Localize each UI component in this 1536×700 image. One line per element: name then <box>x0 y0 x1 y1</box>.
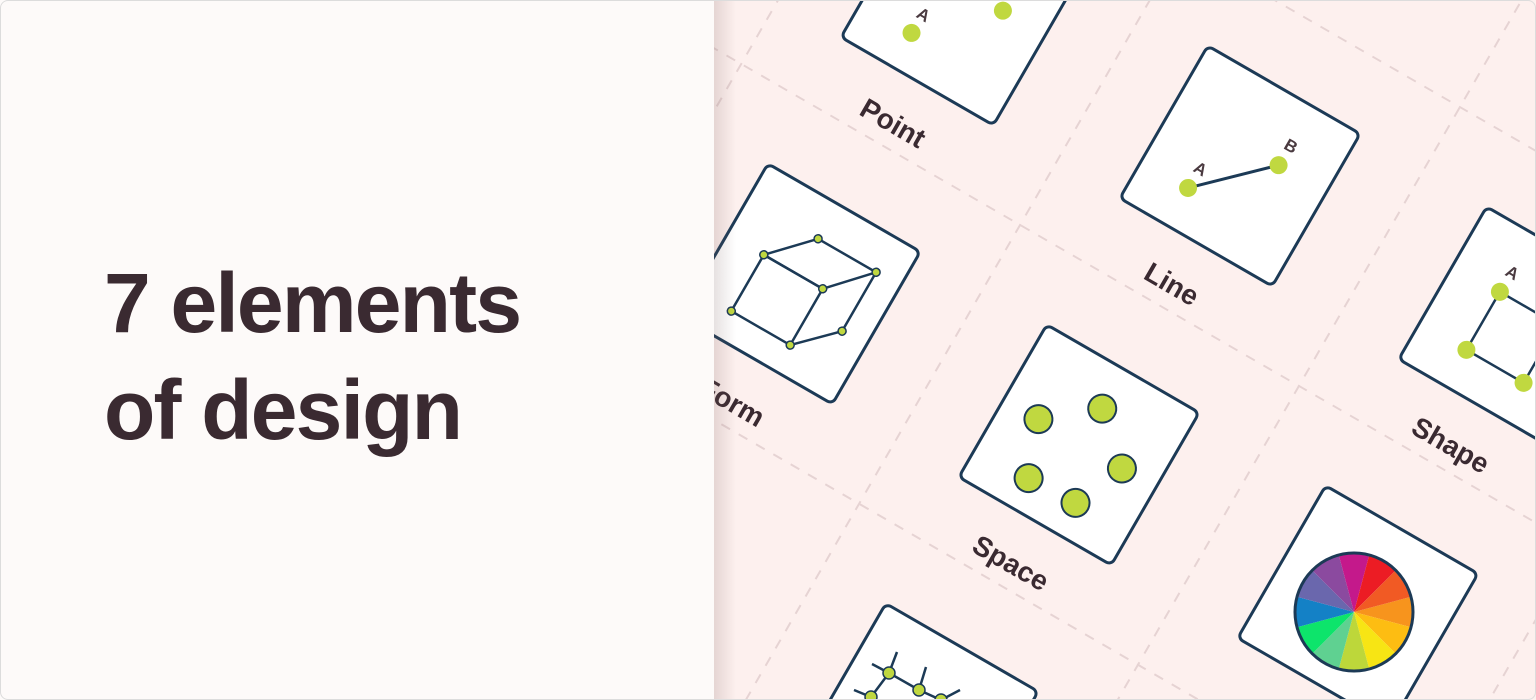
card: Shape <box>1367 207 1536 503</box>
card: Point <box>809 0 1081 181</box>
icon: texture network <box>854 652 960 700</box>
card: Point: A <box>913 4 933 26</box>
left panel <box>0 0 714 700</box>
card: Line: B <box>1281 135 1301 158</box>
card: Shape: Shape <box>1406 411 1495 480</box>
title: of design <box>104 363 461 457</box>
card: Point: Point <box>855 92 931 154</box>
title <box>104 256 520 457</box>
right panel: rotated card grid <box>714 0 1536 700</box>
card: Shape: A <box>1502 262 1522 284</box>
icon: color wheel <box>1294 552 1414 672</box>
card: Texture <box>798 604 1038 700</box>
card: Line: A <box>1190 158 1210 180</box>
card: Color <box>1238 486 1478 700</box>
card: Space <box>927 325 1199 620</box>
title: 7 elements <box>104 256 520 350</box>
card: Space: Space <box>967 529 1054 597</box>
card: Form <box>648 164 920 459</box>
card: Line <box>1088 46 1360 342</box>
card: Line: Line <box>1139 256 1204 312</box>
